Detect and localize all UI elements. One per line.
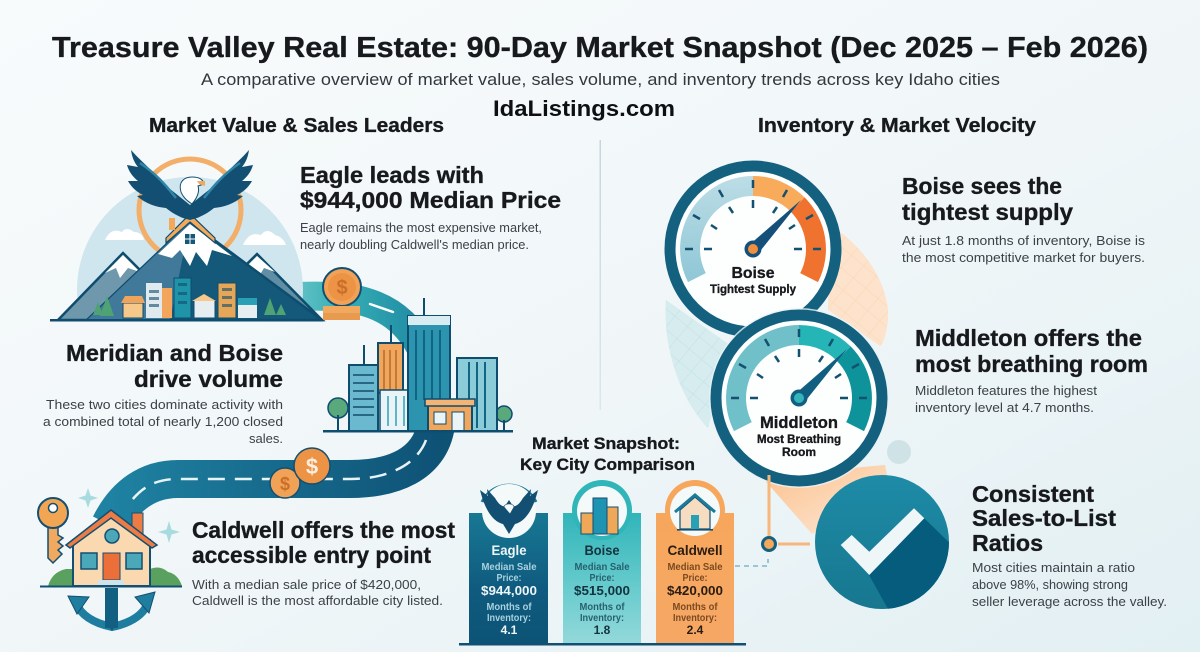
- text: ratios headline: Consistent: [972, 481, 1094, 507]
- card: caldwell: 2.4: [687, 623, 704, 637]
- website label: IdaListings.com: [493, 96, 675, 121]
- title: Treasure Valley Real Estate: 90-Day Market Snapshot (Dec 2025 – Feb 2026): [52, 32, 1148, 64]
- text: middleton description: [915, 383, 1097, 415]
- card: eagle: Inventory:: [487, 612, 531, 624]
- card: eagle: 4.1: [501, 623, 518, 637]
- icon: road coins: $: [280, 474, 290, 494]
- icon: boise towers: [581, 507, 618, 534]
- text: caldwell description: [192, 577, 443, 608]
- text: meridian description: [43, 397, 283, 446]
- card: caldwell: Months of: [672, 601, 718, 613]
- illustration: house, key and anchor: [38, 488, 182, 631]
- text: eagle headline: [300, 162, 561, 213]
- card: eagle: [469, 484, 548, 643]
- upper road: [285, 296, 422, 350]
- card: caldwell: [656, 480, 734, 643]
- icon: anchor: [68, 588, 155, 631]
- text: eagle description: Eagle remains the most expensive market,: [300, 220, 542, 235]
- text: ratios description: above 98%, showing strong: [972, 577, 1128, 592]
- card: eagle: $944,000: [481, 583, 537, 598]
- illustration: eagle on mountain with city: [50, 150, 326, 322]
- text: boise supply headline: [902, 173, 1073, 225]
- text: ratios headline: Sales-to-List: [972, 505, 1116, 531]
- icon: coin stack: [323, 268, 361, 320]
- text: ratios headline: [972, 481, 1116, 556]
- text: middleton headline: most breathing room: [915, 351, 1148, 377]
- card: boise: [563, 480, 641, 643]
- text: ratios description: [972, 560, 1167, 609]
- card: boise: Median Sale: [574, 561, 630, 573]
- lower road: [110, 425, 436, 525]
- card: boise: Months of: [580, 601, 625, 613]
- text: eagle headline: Eagle leads with: [300, 162, 484, 188]
- text: caldwell headline: Caldwell offers the most: [192, 517, 455, 543]
- card: caldwell: Caldwell: [668, 542, 722, 558]
- text: eagle description: nearly doubling Caldwell's median price.: [300, 237, 529, 252]
- text: caldwell description: Caldwell is the most affordable city listed.: [192, 593, 443, 608]
- text: eagle headline: $944,000 Median Price: [300, 187, 561, 213]
- text: meridian description: These two cities dominate activity with: [46, 397, 283, 412]
- card: boise: 1.8: [594, 623, 611, 637]
- text: boise supply description: At just 1.8 months of inventory, Boise is: [902, 233, 1146, 248]
- text: eagle description: [300, 220, 542, 252]
- icon: road coins: [270, 448, 330, 498]
- card: caldwell: Price:: [682, 572, 708, 584]
- text: meridian headline: Meridian and Boise: [66, 340, 283, 366]
- card: caldwell: Inventory:: [673, 612, 717, 624]
- gauge: middleton: Room: [782, 445, 816, 459]
- text: ratios description: seller leverage across the valley.: [972, 594, 1167, 609]
- text: middleton headline: [915, 325, 1148, 377]
- icon: road coins: $: [306, 454, 318, 479]
- card: boise: $515,000: [574, 583, 630, 598]
- text: meridian description: a combined total of nearly 1,200 closed: [43, 414, 283, 429]
- heading: key city comparison: [520, 434, 695, 474]
- text: boise supply description: [902, 233, 1146, 265]
- text: middleton description: inventory level at 4.7 months.: [915, 400, 1094, 415]
- text: caldwell headline: accessible entry point: [192, 542, 431, 568]
- card: caldwell: Median Sale: [668, 561, 723, 573]
- heading: key city comparison: Market Snapshot:: [532, 434, 680, 453]
- gauge: middleton: Most Breathing: [757, 432, 841, 446]
- icon: checkmark badge: [815, 475, 949, 609]
- card: caldwell: $420,000: [667, 583, 723, 598]
- heading: key city comparison: Key City Comparison: [520, 455, 695, 474]
- card: boise: Inventory:: [580, 612, 624, 624]
- text: caldwell headline: [192, 517, 455, 568]
- heading: inventory and market velocity: Inventory & Market Velocity: [758, 115, 1037, 137]
- text: ratios headline: Ratios: [972, 530, 1043, 556]
- icon: eagle: [127, 150, 253, 220]
- gauge: boise: Boise: [732, 265, 775, 282]
- card: eagle: Median Sale: [482, 561, 537, 573]
- text: meridian description: sales.: [249, 431, 283, 446]
- text: boise supply description: the most competitive market for buyers.: [902, 250, 1145, 265]
- card: boise: Boise: [584, 542, 620, 558]
- gauge: middleton: Middleton: [760, 413, 838, 432]
- text: meridian headline: [66, 340, 283, 392]
- gauge: boise: [670, 166, 836, 332]
- text: ratios description: Most cities maintain a ratio: [972, 560, 1135, 575]
- card: boise: Price:: [590, 572, 614, 584]
- icon: coin stack: $: [336, 277, 348, 299]
- card: eagle: Months of: [486, 601, 532, 613]
- text: middleton headline: Middleton offers the: [915, 325, 1142, 351]
- text: middleton description: Middleton features the highest: [915, 383, 1097, 398]
- subtitle: A comparative overview of market value, sales volume, and inventory trends across key Idaho cities: [201, 70, 1000, 89]
- illustration: city skyline: [323, 298, 513, 432]
- gauge: middleton: [709, 308, 889, 488]
- icon: eagle emblem: [480, 489, 538, 534]
- icon: caldwell house: [675, 495, 715, 531]
- card: eagle: Price:: [496, 572, 522, 584]
- text: boise supply headline: Boise sees the: [902, 173, 1062, 199]
- gauge: boise: Tightest Supply: [710, 282, 796, 296]
- text: boise supply headline: tightest supply: [902, 199, 1073, 225]
- connector: card to checkmark: [735, 475, 810, 566]
- icon: key: [38, 498, 68, 563]
- text: meridian headline: drive volume: [134, 366, 283, 392]
- heading: market value and sales leaders: Market Value & Sales Leaders: [149, 115, 444, 137]
- text: caldwell description: With a median sale price of $420,000,: [192, 577, 421, 592]
- card: eagle: Eagle: [492, 542, 527, 558]
